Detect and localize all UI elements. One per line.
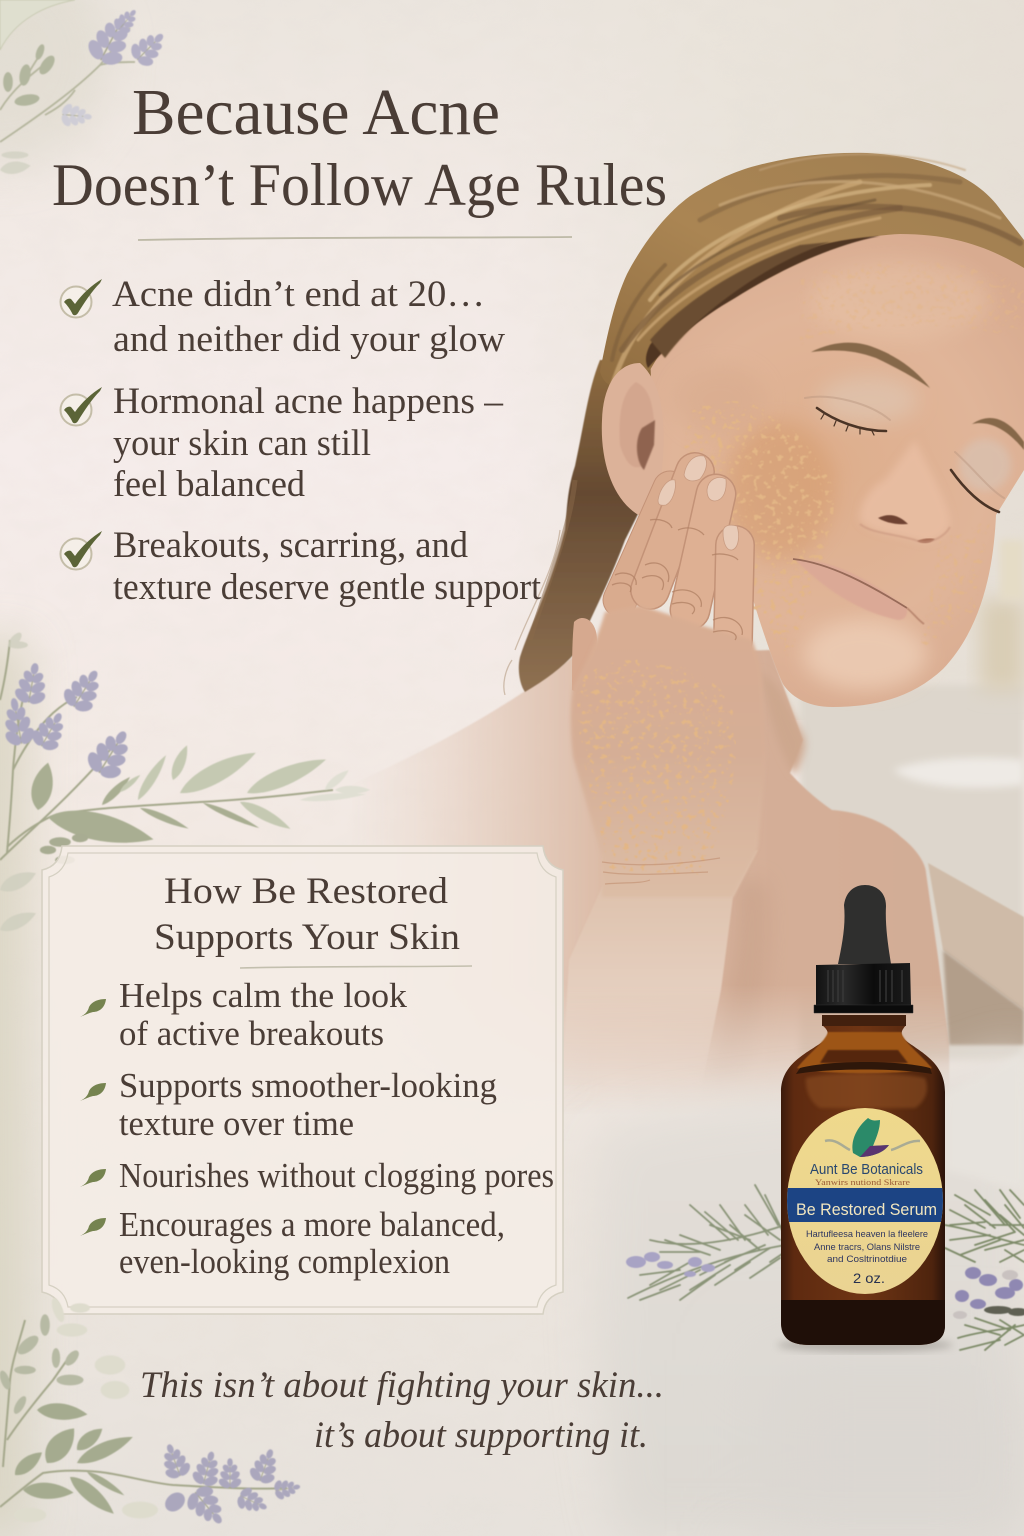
checklist (60, 274, 542, 608)
lips (793, 559, 924, 624)
finger: little (620, 488, 670, 600)
woman: hand (571, 456, 766, 897)
blurred room background right (800, 540, 1024, 1060)
benefit: smoother texture: texture over time (119, 1104, 354, 1143)
label logo (825, 1118, 920, 1157)
eyes (805, 397, 1004, 512)
bottle label: Yanwirs nutiond Skrare (815, 1177, 910, 1187)
bottle label: and Cosltrinotdiue (827, 1254, 907, 1265)
check item 2: Hormonal acne happens – (113, 381, 503, 422)
dropper cap (814, 963, 913, 1013)
check item 3: Breakouts, scarring, and (113, 525, 468, 566)
check item 1: and neither did your glow (113, 319, 505, 360)
nails (658, 456, 739, 550)
check item 1: Acne didn’t end at 20… (112, 274, 485, 315)
bottle label: 2 oz. (853, 1271, 885, 1286)
freckles (680, 261, 1024, 660)
woman: thumb (572, 618, 597, 700)
panel heading (154, 871, 460, 958)
rosemary left of bottle (626, 1185, 785, 1300)
benefit: calm breakouts (80, 976, 408, 1053)
check item 2: your skin can still (113, 423, 371, 464)
dropper bulb (838, 885, 891, 964)
benefit: calm breakouts: of active breakouts (119, 1014, 384, 1053)
panel: how Be Restored supports your skin (42, 846, 563, 1314)
lavender sprigs (0, 660, 143, 788)
foliage: bottom left sprig (0, 1297, 302, 1534)
closing tagline: This isn’t about fighting your skin... (140, 1365, 664, 1406)
glass highlights (781, 1015, 945, 1345)
foliage: top left sprig (0, 0, 174, 176)
check item 2: feel balanced (113, 464, 305, 505)
wrist creases (602, 858, 720, 884)
woman: forearm (568, 852, 756, 1045)
product: serum bottle (777, 885, 953, 1352)
pale feathered leaf (0, 0, 75, 50)
cheek tones (675, 260, 1011, 690)
closing tagline (140, 1365, 664, 1456)
stems (0, 640, 333, 860)
rosemary and lavender right of bottle (945, 1190, 1024, 1350)
check item 3: texture deserve gentle support (113, 567, 542, 608)
lower buds and pale leaves (40, 834, 88, 864)
woman: shoulders and chest (396, 649, 950, 1097)
foliage: middle left branches (0, 630, 370, 936)
woman: face (650, 233, 1024, 707)
benefit: balanced complexion (80, 1205, 505, 1281)
bottle label: Hartufleesa heaven la fleelere (806, 1229, 928, 1240)
title: Because Acne (132, 76, 500, 149)
title: Doesn’t Follow Age Rules (52, 152, 667, 218)
bottle label (780, 1108, 950, 1294)
check item 1 (60, 274, 505, 360)
nose (860, 440, 950, 543)
title (52, 76, 667, 218)
benefit: balanced complexion: Encourages a more balanced, (119, 1205, 505, 1244)
bottle label: Anne tracrs, Olans Nilstre (814, 1242, 920, 1253)
tabletop and towel (594, 1048, 1024, 1536)
benefit: smoother texture (80, 1066, 497, 1143)
benefit: calm breakouts: Helps calm the look (119, 976, 408, 1015)
finger: index (733, 545, 735, 640)
back of hand (571, 605, 766, 897)
sage leaves (28, 760, 261, 852)
woman: ear (602, 363, 664, 517)
brows (811, 343, 1024, 450)
panel frame (42, 846, 563, 1314)
panel heading: How Be Restored (164, 871, 449, 912)
woman: hair on top (600, 153, 1024, 395)
benefit: balanced complexion: even-looking complexion (119, 1242, 450, 1281)
benefit: nourishes: Nourishes without clogging pores (119, 1156, 554, 1195)
glass body (781, 1015, 945, 1345)
bottle label: Be Restored Serum (796, 1200, 937, 1219)
benefit: smoother texture: Supports smoother-looking (119, 1066, 497, 1105)
finger: middle (690, 494, 716, 610)
closing tagline: it’s about supporting it. (314, 1415, 648, 1456)
knuckles (612, 519, 742, 640)
check item 2 (60, 381, 503, 505)
hand freckles (577, 660, 736, 875)
check item 3 (60, 525, 542, 608)
bottle label: Aunt Be Botanicals (810, 1161, 923, 1178)
woman: hair behind neck (504, 360, 660, 695)
finger: ring (650, 472, 695, 590)
panel heading: Supports Your Skin (154, 917, 460, 958)
